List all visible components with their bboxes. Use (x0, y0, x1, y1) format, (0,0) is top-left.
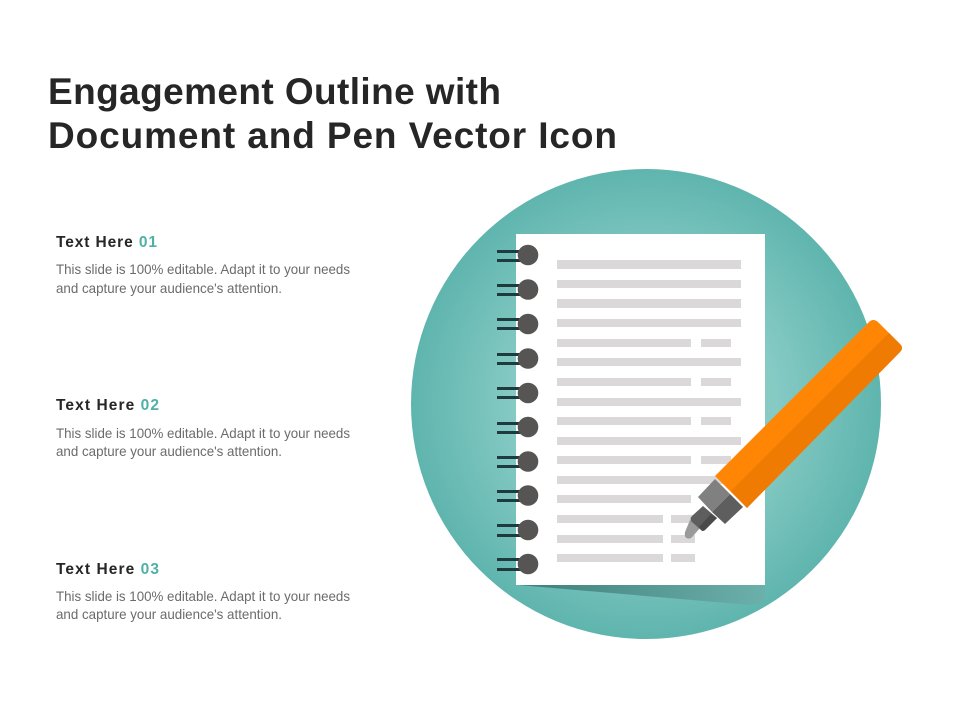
paper shadow (518, 585, 765, 605)
text block 01: This slide is 100% editable. Adapt it to your needs (56, 261, 350, 277)
text block 02: and capture your audience's attention. (56, 443, 282, 459)
text block 02 (56, 397, 350, 459)
pen tip (690, 506, 717, 531)
pen grip (698, 479, 730, 512)
text block 02: Text Here 02 (56, 397, 159, 414)
text block 02: This slide is 100% editable. Adapt it to your needs (56, 425, 350, 441)
pen icon (685, 320, 902, 539)
text block 01: and capture your audience's attention. (56, 280, 282, 296)
text block 03: Text Here 03 (56, 561, 159, 578)
pen body (715, 320, 902, 508)
title: Document and Pen Vector Icon (48, 115, 617, 156)
text block 01: Text Here 01 (56, 234, 157, 251)
title: Engagement Outline with (48, 71, 501, 112)
teal circle background (411, 169, 881, 639)
document text lines (557, 260, 741, 562)
text block 03 (56, 561, 350, 622)
text block 03: This slide is 100% editable. Adapt it to your needs (56, 588, 350, 604)
document page (516, 234, 765, 585)
pen nib (685, 520, 701, 539)
text block 03: and capture your audience's attention. (56, 606, 282, 622)
title (48, 71, 617, 156)
spiral binding (497, 245, 538, 574)
text block 01 (56, 234, 350, 296)
